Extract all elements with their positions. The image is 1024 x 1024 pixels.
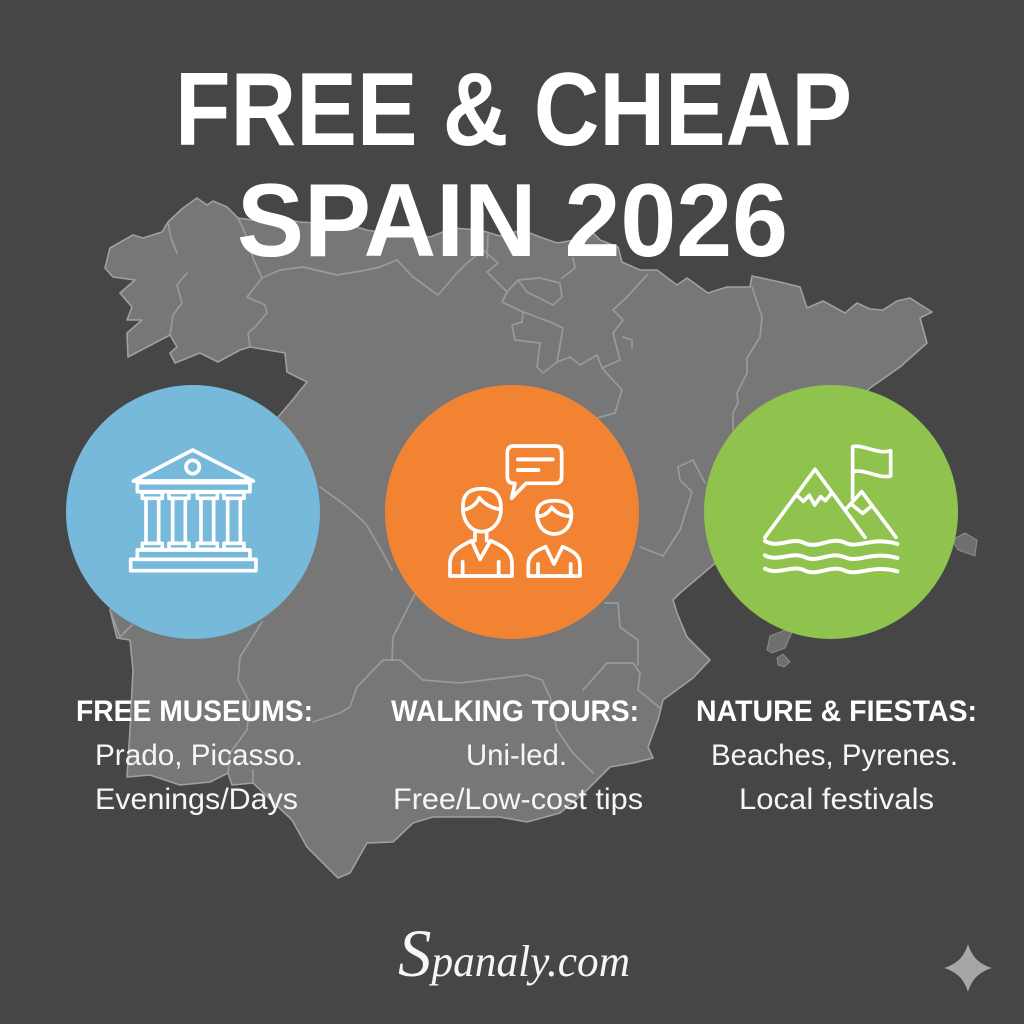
museums text: Prado, Picasso.	[95, 739, 303, 772]
Balearic islands	[767, 533, 977, 667]
brand: Spanaly.com: Spanaly.com	[398, 915, 630, 991]
museums text: Evenings/Days	[95, 783, 298, 816]
title: SPAIN 2026	[237, 163, 788, 279]
panel: nature and fiestas	[696, 385, 977, 816]
orange circle	[385, 385, 639, 639]
region borders	[110, 218, 762, 783]
icon: mountains with flag and waves	[765, 446, 897, 572]
museums text: FREE MUSEUMS:	[76, 695, 313, 728]
icon: sparkle	[944, 944, 992, 992]
walking tours text: WALKING TOURS:	[391, 695, 639, 728]
icon: people talking	[450, 446, 580, 576]
blue circle	[66, 385, 320, 639]
title	[175, 52, 852, 279]
walking tours text	[391, 695, 643, 816]
museums text	[76, 695, 313, 816]
nature and fiestas text: Beaches, Pyrenes.	[711, 739, 958, 772]
walking tours text: Free/Low-cost tips	[393, 783, 643, 816]
map of Spain and Portugal	[105, 198, 977, 878]
panel: walking tours	[385, 385, 643, 816]
nature and fiestas text	[696, 695, 977, 816]
panel: free museums	[66, 385, 320, 816]
nature and fiestas text: NATURE & FIESTAS:	[696, 695, 977, 728]
title: FREE & CHEAP	[175, 52, 852, 168]
nature and fiestas text: Local festivals	[739, 783, 934, 816]
icon: museum	[131, 450, 256, 571]
green circle	[704, 385, 958, 639]
walking tours text: Uni-led.	[466, 739, 567, 772]
